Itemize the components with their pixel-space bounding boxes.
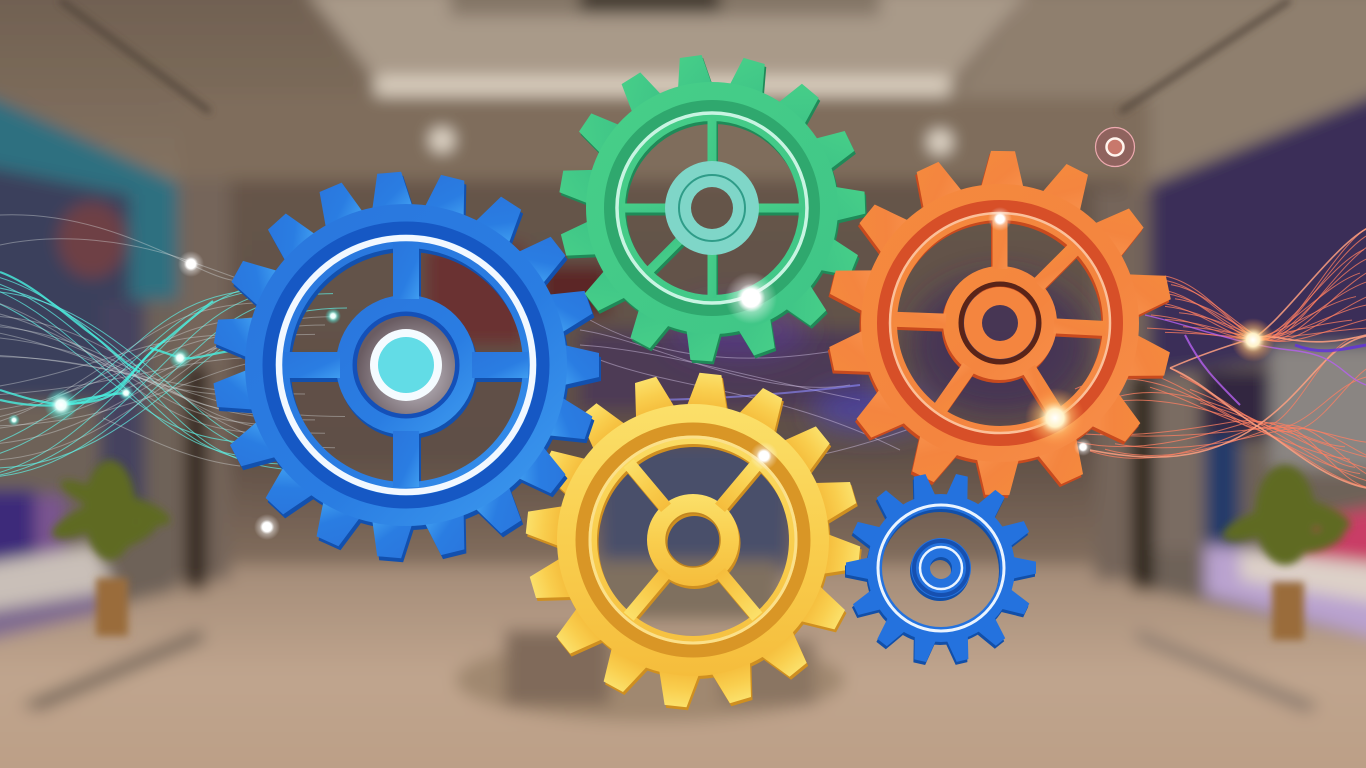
teal hub	[665, 161, 759, 255]
center table	[455, 638, 845, 722]
left wall	[0, 90, 178, 640]
green hub inner ring	[679, 175, 745, 241]
gear: large blue left	[212, 171, 601, 563]
pink ring lens flare	[1096, 128, 1134, 166]
right red and orange light waves	[1065, 226, 1366, 488]
maroon and violet reflections	[425, 245, 525, 345]
right wall	[1150, 90, 1366, 640]
gear: small blue lower right	[845, 473, 1036, 666]
cyan glowing hub	[357, 316, 455, 414]
gear: orange right	[826, 151, 1173, 498]
left teal light waves	[0, 215, 347, 480]
central violet energy threads	[580, 320, 920, 460]
light sparkles	[8, 207, 1275, 540]
gear: green top	[558, 54, 867, 365]
gear: yellow bottom	[525, 372, 863, 711]
orange inner hub ring	[964, 287, 1036, 359]
